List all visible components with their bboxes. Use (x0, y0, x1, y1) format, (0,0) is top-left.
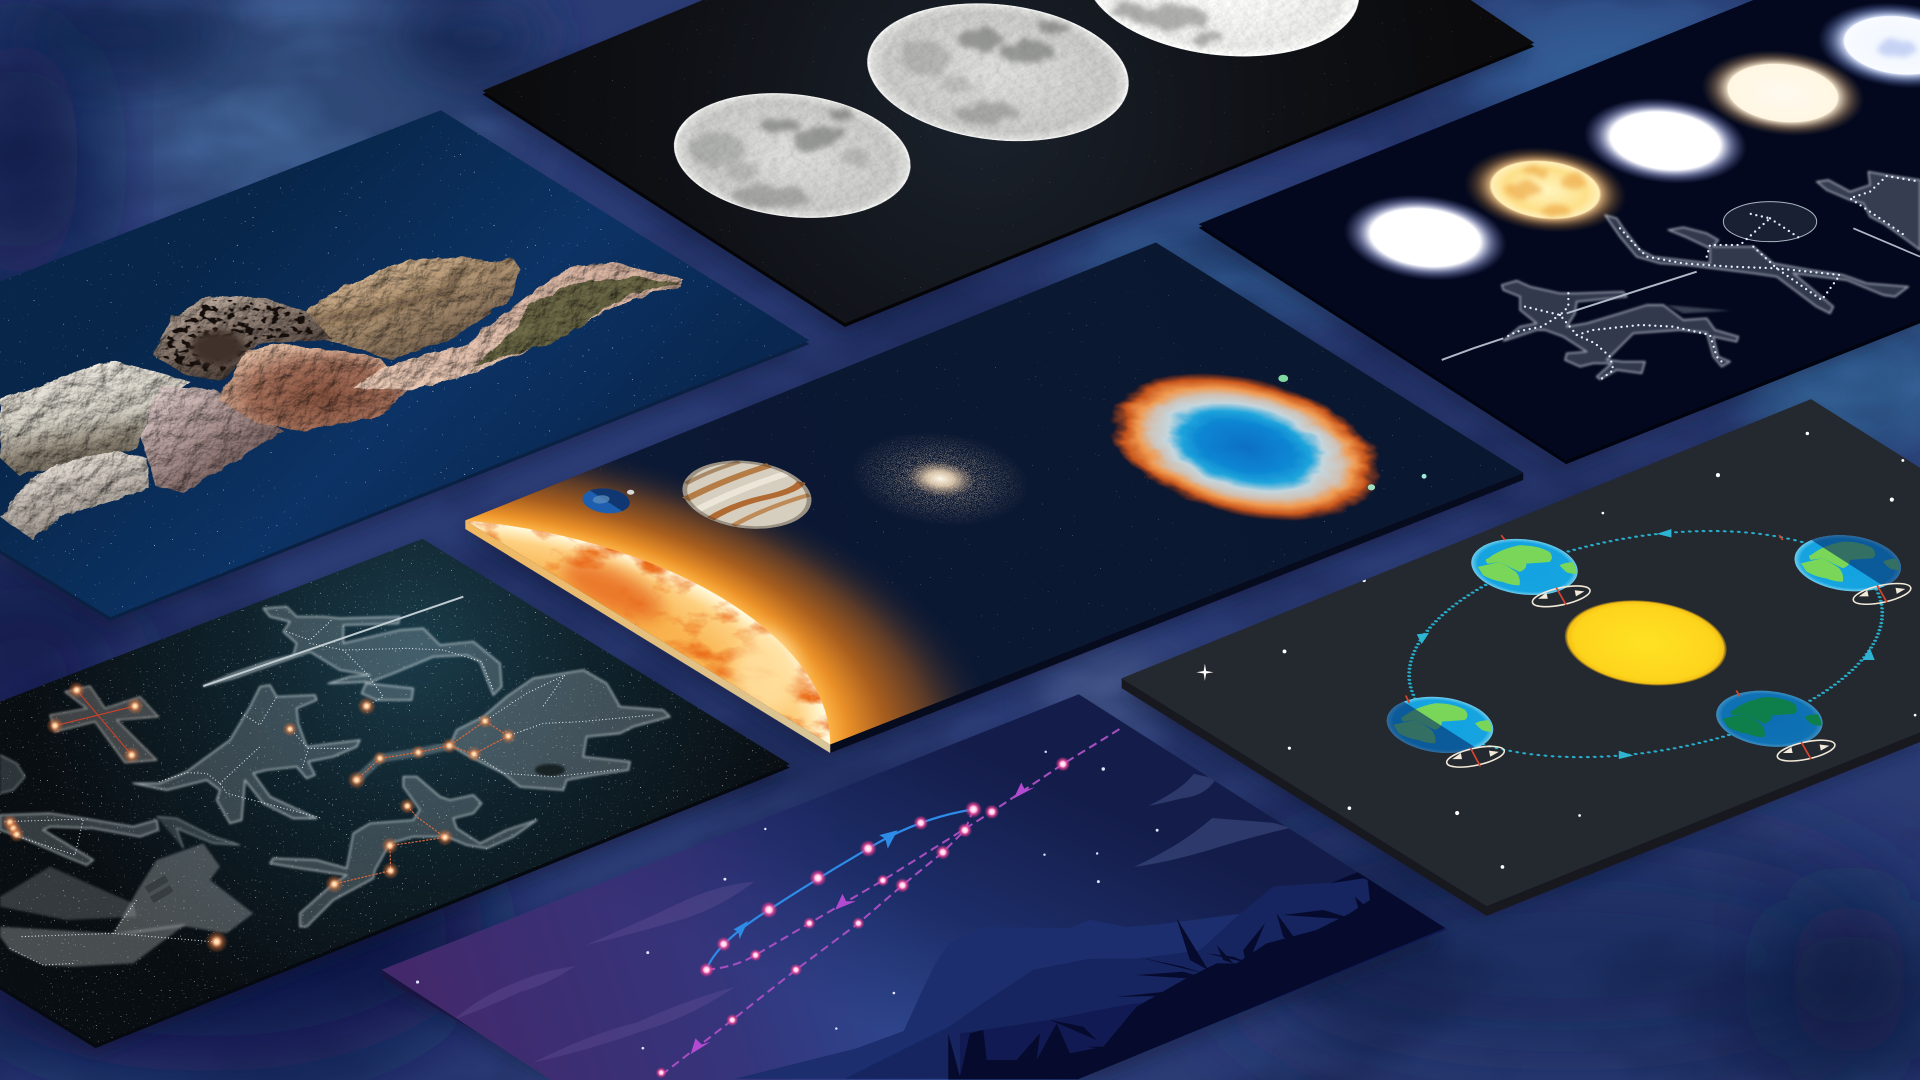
star: blue white (1550, 81, 1781, 201)
rock: tan boulder (290, 257, 520, 360)
panel: asteroid rocks (0, 110, 820, 629)
constellation: archer at edge (0, 755, 240, 865)
small stars (1283, 432, 1916, 869)
sun edge thickness (465, 520, 830, 753)
panel: sun, planets, cluster, nebula (0, 242, 1531, 1080)
rock: white block (0, 360, 190, 475)
rock: pink grey (141, 386, 284, 492)
rock: layered speckled (354, 262, 683, 389)
planet: jupiter (656, 447, 838, 542)
star field: rocks panel (0, 110, 820, 624)
orange bright stars (2, 681, 516, 953)
constellation: cross (50, 686, 158, 763)
constellation: bear with dipper (357, 670, 670, 790)
earth: bottom left, half lit (1365, 686, 1515, 764)
moon: left (674, 93, 911, 218)
constellation: ship (0, 843, 253, 967)
star: yellow (1430, 130, 1661, 250)
constellation: centaur (203, 597, 502, 706)
path arrows (691, 782, 1035, 1054)
star field: center panel (465, 242, 1531, 757)
mountains: near ridge (845, 872, 1447, 1079)
rock: white lower left (0, 451, 149, 540)
rock: red brown (218, 343, 407, 431)
rock: pitted dark meteorite (153, 296, 331, 382)
earth: bottom right, night (1694, 680, 1845, 758)
earth: top left, day (1449, 528, 1600, 606)
panel: night sky planet path (378, 694, 1448, 1080)
rotation rings with arrows (1406, 535, 1913, 771)
figure: rider at edge (1817, 172, 1920, 257)
sun glow (0, 312, 1234, 1080)
constellation: kneeling woman (270, 777, 537, 927)
constellation: wolf (133, 685, 360, 823)
wispy clouds (453, 882, 754, 1063)
mountains: darkest foreground ridge (960, 927, 1447, 1079)
star field: moons panel (511, 0, 1517, 305)
figure: warrior with shield (1605, 202, 1908, 313)
mountains: far ridge (735, 872, 1447, 1079)
sun disc (0, 442, 983, 984)
spear (1442, 272, 1697, 360)
planet path: dashed return lines (661, 729, 1120, 1075)
tail (1667, 305, 1730, 313)
panel: moons (478, 0, 1543, 336)
moon: middle (867, 3, 1129, 142)
panel: star constellations on teal sky (0, 539, 796, 1057)
star field: constellation panel (0, 539, 796, 1053)
moon: right bright (1028, 0, 1416, 85)
orbit: dotted ellipse (1321, 484, 1920, 804)
figure: centaur with spear (1442, 272, 1738, 380)
star: warm white (1667, 33, 1898, 153)
stars: night panel (416, 751, 1291, 1050)
dotted star lines (1503, 293, 1722, 380)
planet: earth (573, 483, 640, 518)
star: blue (1784, 0, 1920, 105)
sparkle star (1196, 664, 1213, 681)
earth: top right, half lit (1772, 524, 1920, 602)
pink star points on path (656, 757, 1070, 1078)
panel: earth orbit seasons (1118, 399, 1920, 921)
orbit arrows (1417, 529, 1875, 759)
grass silhouette (948, 870, 1448, 1079)
sun surface patches (554, 549, 797, 715)
dotted star lines (1620, 213, 1840, 300)
sun (1531, 583, 1760, 702)
panel: stars and constellations (1195, 0, 1920, 473)
shield (1723, 202, 1817, 242)
planet path: forward blue arc (707, 809, 973, 970)
globular star cluster (815, 414, 1066, 544)
helix nebula (1054, 346, 1436, 548)
star: white (1310, 178, 1541, 297)
